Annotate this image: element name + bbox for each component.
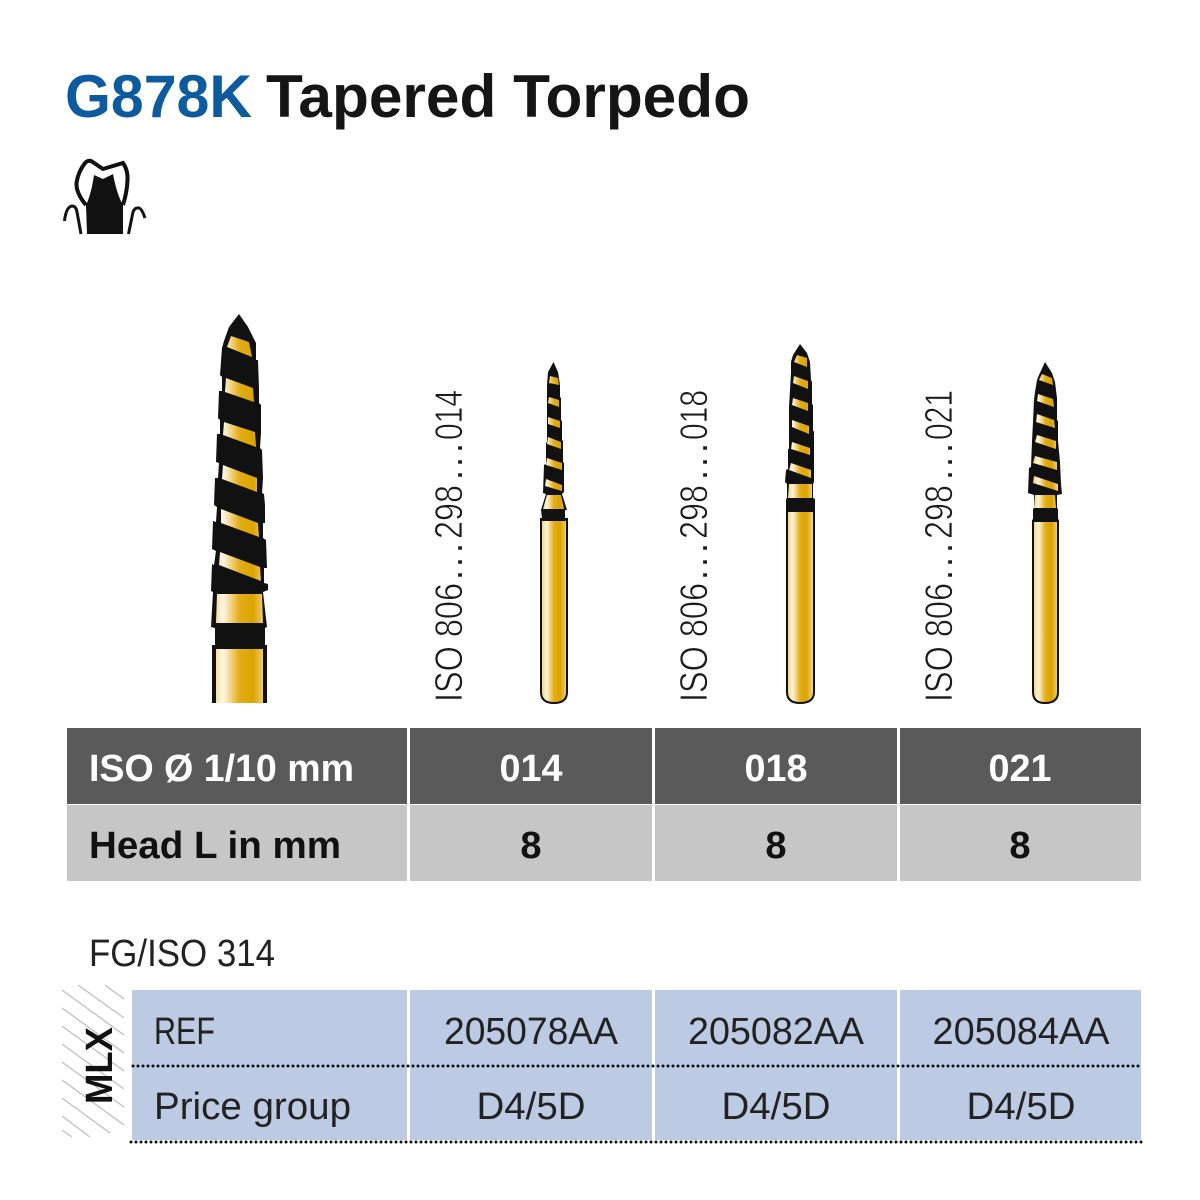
label: ISO 014: 298 [428,485,471,539]
row: ISO diameter: 018 [744,748,808,790]
dotted row lines [131,1066,1145,1142]
title: Tapered Torpedo [266,63,750,130]
row: price group: Price group [154,1086,351,1128]
label: ISO 021: ... [919,443,960,480]
bur: ISO 018 [785,344,815,704]
label: ISO 014: ... [429,443,470,480]
label: ISO 018: 298 [673,485,716,539]
label: ISO 014: ISO 806 [428,583,471,702]
table: REF and price group [131,990,1145,1142]
table: ISO diameter and head length [67,728,1141,881]
row: ISO diameter: 021 [988,748,1052,790]
row: REF: 205078AA [444,1011,619,1053]
label: ISO 021 [918,390,961,702]
label: FG/ISO 314: FG/ISO 314 [89,933,275,975]
row: ISO diameter: 014 [500,748,562,790]
label: ISO 021: 298 [918,485,961,539]
label: ISO 018: ... [674,443,715,480]
label: ISO 018: ISO 806 [673,583,716,702]
label: ISO 021: ... [919,543,960,580]
row: price group: D4/5D [722,1086,830,1128]
bur: ISO 021 [1028,362,1062,704]
title: G878K [65,63,252,130]
label: ISO 014: 014 [428,390,471,440]
label: ISO 018: 018 [673,390,716,440]
label: ISO 018 [673,390,716,702]
row: price group [154,1086,1076,1128]
label: ISO 021: ISO 806 [918,583,961,702]
row: head length: 8 [1009,825,1031,867]
row: REF: 205082AA [688,1011,865,1053]
label: ISO 014: ... [429,543,470,580]
row: head length: Head L in mm [89,825,341,867]
hatch background [62,985,124,1137]
label: ISO 021: 021 [918,390,961,440]
row: price group: D4/5D [476,1086,586,1128]
label: MLX: MLX [79,1026,121,1104]
row: price group: D4/5D [966,1086,1076,1128]
row: head length: 8 [520,825,542,867]
row: ISO diameter [67,728,1141,804]
row: head length [67,805,1141,881]
row: REF: REF [154,1011,215,1053]
icon: tooth preparation [64,161,145,234]
label: ISO 018: ... [674,543,715,580]
bur: large detail view [211,314,268,703]
label: ISO 014 [428,390,471,702]
row: head length: 8 [765,825,787,867]
row: ISO diameter: ISO Ø 1/10 mm [89,748,354,790]
row: REF: 205084AA [932,1011,1110,1053]
row: REF [154,1011,1110,1053]
bur: ISO 014 [540,362,568,704]
